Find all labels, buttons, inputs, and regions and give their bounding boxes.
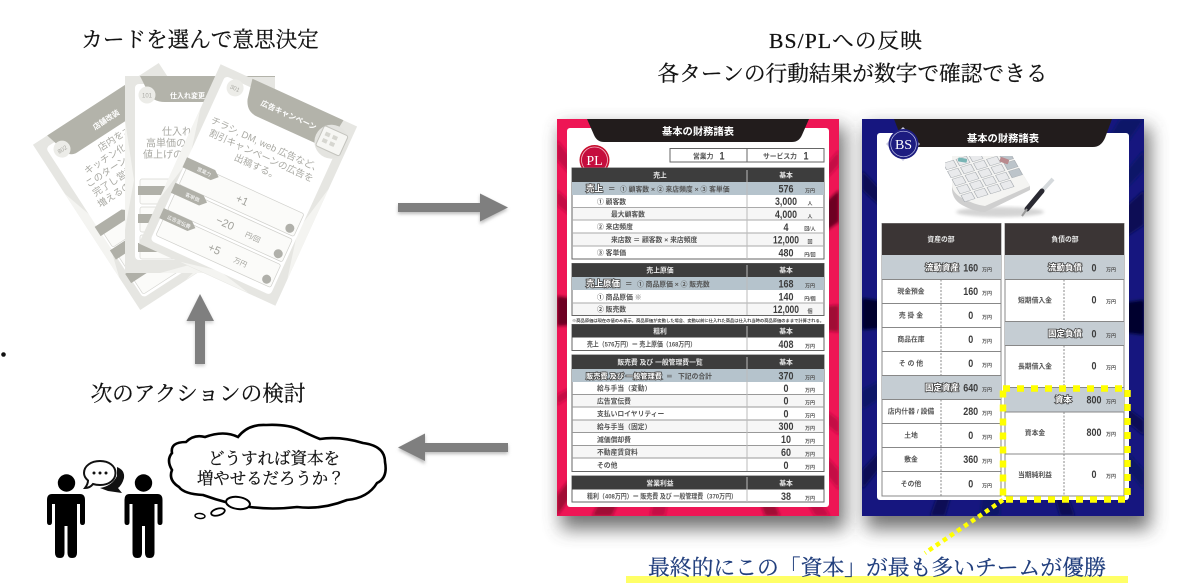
table: cost of sales: 140 (778, 292, 794, 304)
table: SG&A: 万円 (805, 400, 815, 406)
table: SG&A: 基本 (779, 358, 793, 366)
table: sales: 来店数 ＝ 顧客数 × 来店頻度 (611, 235, 697, 244)
table: assets: その他 (901, 479, 921, 488)
table: liabilities and capital: 短期借入金 (1018, 296, 1052, 304)
table: assets: 万円 (982, 291, 992, 297)
table: SG&A: 販売費 及び 一般管理費一覧 (617, 358, 703, 366)
table: cost of sales: 個 (807, 308, 813, 315)
table: cost of sales: 売上原価 (646, 266, 674, 274)
table: SG&A: 販売費 及び 一般管理費 (586, 372, 662, 380)
table: liabilities and capital: 万円 (1106, 400, 1116, 406)
table: assets: 0 (968, 310, 973, 322)
table: operating profit: 万円 (805, 496, 815, 502)
table: assets: 280 (963, 406, 978, 418)
table: SG&A: 0 (784, 408, 788, 420)
card 301: ad campaign: 301 (229, 84, 241, 94)
table: assets: 土地 (904, 430, 918, 440)
table: sales: 基本 (779, 170, 793, 180)
table: SG&A: 万円 (805, 452, 815, 458)
table: liabilities and capital: 万円 (1106, 474, 1116, 480)
shadow: PL sheet (561, 127, 845, 529)
table: liabilities and capital: 800 (1086, 427, 1102, 439)
table: assets: 現金預金 (897, 286, 925, 296)
conclusion text: 最終的にこの「資本」が最も多いチームが優勝 (648, 556, 1106, 580)
table: liabilities and capital: 0 (1092, 262, 1096, 274)
BS badge: BS (895, 138, 912, 153)
table: assets: 0 (968, 334, 973, 346)
table: sales: 万円 (805, 188, 815, 194)
callout: dotted leader line (925, 500, 1003, 553)
card 301: ad campaign: 割引キャンペーンの広告を (207, 127, 315, 185)
table: liabilities and capital: 万円 (1106, 300, 1116, 306)
table: SG&A: 減価償却費 (597, 435, 631, 444)
card 301: ad campaign: −20 (214, 215, 236, 233)
table: SG&A: 60 (781, 447, 791, 459)
title: card selection: カードを選んで意思決定 (81, 28, 319, 52)
table: sales: 12,000 (773, 234, 799, 246)
card 802: store renovation: 店舗改装 (91, 107, 122, 132)
table: assets: 店内什器 / 設備 (888, 406, 934, 416)
table: assets: 万円 (982, 435, 992, 441)
icon: two people talking (47, 461, 162, 558)
card 802: store renovation: キッチン化 す (83, 135, 139, 177)
table: liabilities and capital: 0 (1092, 294, 1096, 306)
heading tab: 基本の財務諸表 (967, 132, 1040, 145)
card 301: ad campaign: チラシ, DM, web 広告など、 (209, 114, 324, 175)
table: assets: 360 (963, 454, 978, 466)
PL badge: PL (586, 154, 603, 169)
title: BS/PL reflection: BS/PLへの反映 (769, 29, 923, 53)
table: liabilities and capital: 万円 (1106, 366, 1116, 372)
table: sales: 3,000 (775, 196, 797, 208)
icon: calculator and pen (945, 156, 1054, 218)
table: assets: 0 (968, 358, 973, 370)
table: assets: 万円 (982, 268, 992, 274)
card 802: store renovation: 完了し営業 (90, 163, 137, 199)
table: assets: 敷金 (904, 454, 918, 464)
table: SG&A: ＝ (666, 374, 673, 380)
table: assets: 万円 (982, 363, 992, 369)
card 301: ad campaign: 出稿する。 (232, 151, 280, 182)
decision cards fan (33, 63, 357, 310)
table: SG&A: 300 (778, 421, 794, 433)
table: assets: 万円 (982, 315, 992, 321)
card 101: purchasing change: 高単価の (146, 136, 186, 150)
card 301: ad campaign: 営業力 (196, 166, 212, 178)
icon: tablet photo (309, 119, 354, 164)
title: next action: 次のアクションの検討 (91, 382, 305, 406)
table: sales: ① 顧客数 (597, 197, 626, 206)
table: sales: ③ 客単価 (597, 248, 626, 257)
card 101: purchasing change: 仕入れ変更 (170, 91, 205, 100)
card 301: ad campaign: 円/回 (244, 231, 261, 245)
table: SG&A: 0 (784, 396, 788, 408)
table: SG&A: 10 (781, 434, 791, 446)
table: operating profit: 営業利益 (646, 478, 674, 488)
card 802: store renovation: 増えるの (95, 180, 133, 210)
table: assets: 固定資産 (925, 382, 960, 392)
table: liabilities and capital: 固定負債 (1048, 328, 1083, 338)
table: assets (882, 224, 1001, 496)
thought text (197, 449, 345, 488)
table: sales: ＝ (608, 184, 616, 194)
table: gross profit: 粗利 (653, 326, 667, 336)
table: liabilities and capital: 万円 (1106, 334, 1116, 340)
table: cost of sales: 万円 (805, 284, 815, 290)
table: assets: 売 掛 金 (899, 310, 923, 320)
card 301: ad campaign: 広告宣伝費 (166, 214, 192, 231)
table: cost of sales (572, 264, 824, 316)
table: liabilities and capital: 800 (1086, 394, 1102, 406)
arrow: statements to next action (398, 434, 508, 464)
table: SG&A: 万円 (805, 426, 815, 432)
table: cost of sales: 168 (778, 278, 794, 290)
heading tab (587, 119, 809, 142)
table: cost of sales: ＝ (625, 280, 632, 288)
card 802: store renovation: 店内をオー (96, 118, 142, 154)
icon: speech bubbles (84, 461, 124, 493)
table: assets: 万円 (982, 459, 992, 465)
table: SG&A: 万円 (805, 376, 815, 382)
thought text: どうすれば資本を (208, 449, 340, 468)
table: sales: 回/人 (804, 226, 816, 232)
table: SG&A: 万円 (805, 465, 815, 471)
card 101: purchasing change: 仕入れ (162, 125, 192, 138)
table: assets: 640 (963, 382, 978, 394)
table: assets: 万円 (982, 339, 992, 345)
heading tab (894, 119, 1112, 147)
table: liabilities and capital: 資本金 (1025, 428, 1045, 437)
card 301: ad campaign: +1 (234, 193, 250, 209)
table: gross profit (572, 324, 824, 351)
table: sales (572, 168, 824, 260)
ability scores: サービス力 (763, 152, 797, 160)
table: liabilities and capital: 0 (1092, 328, 1096, 340)
table: gross profit: 万円 (805, 344, 815, 350)
table: gross profit: 売上（576万円）ー 売上原価（168万円） (587, 340, 696, 348)
card 301: ad campaign: 広告キャンペーン (259, 98, 319, 132)
table: assets: 万円 (982, 484, 992, 490)
table: cost of sales: ② 販売数 (597, 304, 626, 314)
table: sales: 人 (807, 201, 813, 207)
arrow: cards to statements (398, 194, 508, 224)
table: SG&A: 370 (778, 370, 794, 382)
callout: capital highlight box (1003, 388, 1128, 500)
table: sales: 最大顧客数 (611, 210, 645, 218)
table: assets: 資産の部 (927, 234, 955, 244)
table: assets: 160 (963, 262, 978, 274)
title: BS/PL reflection: 各ターンの行動結果が数字で確認できる (658, 62, 1047, 86)
ability scores (670, 148, 824, 162)
table: SG&A: 給与手当（固定） (597, 422, 651, 431)
stray bullet dot (1, 352, 6, 357)
table: SG&A: 万円 (805, 414, 815, 420)
highlight band under conclusion (626, 576, 1128, 583)
table: liabilities and capital: 長期借入金 (1018, 362, 1052, 370)
table: liabilities and capital: 0 (1092, 469, 1096, 481)
table: assets: 万円 (982, 388, 992, 394)
table: liabilities and capital (1005, 224, 1124, 496)
title: BS/PL reflection (658, 29, 1047, 86)
table: liabilities and capital: 当期純利益 (1018, 470, 1052, 479)
table: cost of sales: 基本 (779, 266, 793, 274)
card 802: store renovation: 802 (57, 145, 69, 156)
table: cost of sales: 12,000 (773, 304, 799, 316)
table: cost of sales: 円/個 (804, 296, 816, 302)
table: sales: 売上 (653, 170, 667, 180)
arrow: next action up to cards (186, 294, 214, 366)
table: sales: 4,000 (775, 209, 797, 221)
card 301: ad campaign: 客単価 (184, 191, 201, 204)
table: assets: 0 (968, 430, 973, 442)
table: assets: 商品在庫 (897, 334, 925, 344)
table: SG&A: 広告宣伝費 (597, 396, 631, 406)
panel: PL sheet (557, 119, 839, 516)
table: SG&A: その他 (597, 460, 618, 470)
panel: BS sheet (862, 119, 1144, 516)
table: SG&A: 支払いロイヤリティー (597, 409, 665, 418)
table: cost of sales: ① 商品原価 ※ (597, 292, 642, 302)
table: sales: 480 (778, 248, 794, 260)
table: assets: 万円 (982, 411, 992, 417)
table: sales: 4 (784, 222, 789, 234)
table: gross profit: 基本 (779, 326, 793, 336)
ability scores: 1 (720, 150, 724, 162)
card 101: purchasing change: 値上げの (143, 148, 183, 161)
table: SG&A: 給与手当（変動） (597, 384, 651, 392)
table: liabilities and capital: 資本 (1055, 394, 1073, 404)
table: operating profit (572, 476, 824, 503)
thought cloud (169, 425, 386, 519)
table: liabilities and capital: 万円 (1106, 432, 1116, 438)
table: liabilities and capital: 流動負債 (1048, 262, 1083, 272)
table: sales: 売上 (586, 184, 604, 194)
table: sales: 人 (807, 214, 813, 220)
ability scores: 1 (804, 150, 808, 162)
table: SG&A (572, 355, 824, 472)
card 802: store renovation (33, 63, 266, 310)
table: operating profit: 基本 (779, 478, 793, 488)
card 301: ad campaign: +5 (206, 242, 222, 258)
table: assets: 160 (963, 286, 978, 298)
table: operating profit: 粗利（408万円）ー 販売費 及び 一般管理費（370万円） (587, 492, 737, 500)
PL badge (580, 145, 610, 176)
table: sales: 回 (807, 240, 813, 246)
table: assets: そ の 他 (899, 358, 923, 368)
table: operating profit: 38 (781, 491, 791, 503)
table: cost of sales: 売上原価 (586, 278, 621, 288)
ability scores: 営業力 (693, 152, 714, 160)
table: assets: 流動資産 (925, 262, 960, 272)
table: sales: ① 顧客数 × ② 来店頻度 × ③ 客単価 (620, 184, 730, 194)
table: gross profit: 408 (778, 339, 794, 351)
table: SG&A: 不動産賃貸料 (597, 448, 638, 456)
shadow: BS sheet (866, 127, 1150, 529)
table: sales: 576 (778, 184, 794, 196)
card 101: purchasing change: 101 (142, 94, 153, 100)
table: sales: ② 来店頻度 (597, 222, 633, 231)
footnote: ※商品原価は現在の値のみ表示。商品原価が変動した場合、変動以前に仕入れた商品は仕入れ当時の商品原価のままで計算される。 (572, 317, 824, 324)
table: liabilities and capital: 負債の部 (1051, 234, 1079, 244)
thought text: 増やせるだろうか？ (197, 469, 345, 488)
table: cost of sales: ① 商品原価 × ② 販売数 (637, 280, 710, 288)
table: liabilities and capital: 0 (1092, 360, 1096, 372)
table: SG&A: 万円 (805, 388, 815, 394)
table: liabilities and capital: 万円 (1106, 268, 1116, 274)
table: sales: 円/回 (804, 252, 816, 258)
card 301: ad campaign (139, 64, 357, 306)
table: SG&A: 0 (784, 383, 788, 395)
card 101: purchasing change (125, 76, 275, 273)
BS badge (886, 127, 920, 161)
table: SG&A: 0 (784, 460, 788, 472)
table: assets: 0 (968, 478, 973, 490)
table: SG&A: 万円 (805, 439, 815, 445)
card 301: ad campaign: 万円 (232, 256, 248, 269)
table: SG&A: 下記の合計 (678, 372, 712, 380)
heading tab: 基本の財務諸表 (662, 125, 735, 138)
card 802: store renovation: このターンに (84, 150, 137, 190)
